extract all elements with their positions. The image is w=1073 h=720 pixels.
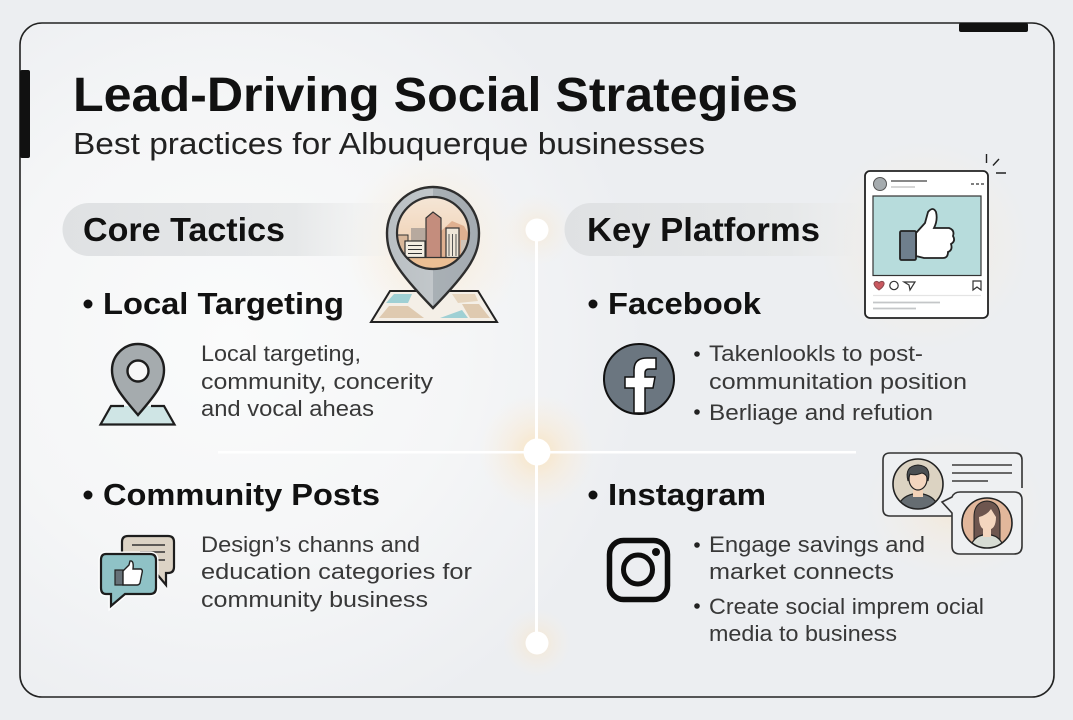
heading: community posts: Community Posts: [103, 477, 380, 512]
frame accent: top bar: [959, 23, 1028, 32]
bullet: [84, 490, 92, 500]
subsection: facebook: [588, 286, 967, 425]
panel: key platforms: [564, 154, 1022, 646]
text block: instagram bullets: [694, 532, 984, 646]
subsection: instagram: [588, 453, 1022, 646]
illustration: conversation avatars: [883, 453, 1022, 554]
heading: core tactics: [63, 203, 395, 256]
text block: facebook bullets: Takenlookls to post-: [709, 341, 923, 366]
text block: facebook bullets: communitation position: [709, 369, 967, 394]
text block: instagram bullets: Create social imprem ocial: [709, 594, 984, 619]
illustration: social post with thumbs up: [865, 154, 1006, 318]
icon: location pin on map: [100, 344, 174, 424]
heading: instagram: Instagram: [608, 477, 766, 512]
text block: community posts: community business: [201, 587, 428, 612]
text block: instagram bullets: Engage savings and: [709, 532, 925, 557]
bullet: [84, 300, 92, 308]
heading: facebook: Facebook: [608, 286, 762, 321]
text block: community posts: [201, 532, 472, 612]
icon: facebook logo: [604, 344, 674, 414]
subsection: community posts: [84, 477, 472, 612]
title: Lead-Driving Social Strategies: [73, 69, 798, 122]
text block: community posts: Design’s channs and: [201, 532, 420, 557]
text block: local targeting: community, concerity: [201, 369, 433, 394]
timeline connector: [218, 194, 856, 677]
bullet: [588, 300, 598, 308]
subsection: local targeting: [84, 286, 433, 424]
text block: facebook bullets: [694, 341, 967, 425]
text block: facebook bullets: Berliage and refution: [709, 400, 933, 425]
frame accent: left bar: [20, 70, 30, 158]
heading: key platforms: [564, 203, 885, 256]
text block: local targeting: Local targeting,: [201, 341, 361, 366]
subtitle: Best practices for Albuquerque businesses: [73, 126, 705, 161]
panel: core tactics: [63, 187, 497, 612]
text block: community posts: education categories for: [201, 559, 472, 584]
icon: chat bubbles with thumbs up: [101, 536, 174, 606]
icon: instagram logo: [610, 540, 668, 600]
text block: local targeting: and vocal aheas: [201, 396, 374, 421]
text block: instagram bullets: market connects: [709, 559, 894, 584]
text block: local targeting: [201, 341, 433, 421]
text block: instagram bullets: media to business: [709, 621, 897, 646]
heading: key platforms: Key Platforms: [587, 211, 820, 248]
heading: local targeting: Local Targeting: [103, 286, 344, 321]
illustration: city map pin: [371, 187, 497, 322]
heading: core tactics: Core Tactics: [83, 211, 285, 248]
bullet: [588, 490, 598, 500]
